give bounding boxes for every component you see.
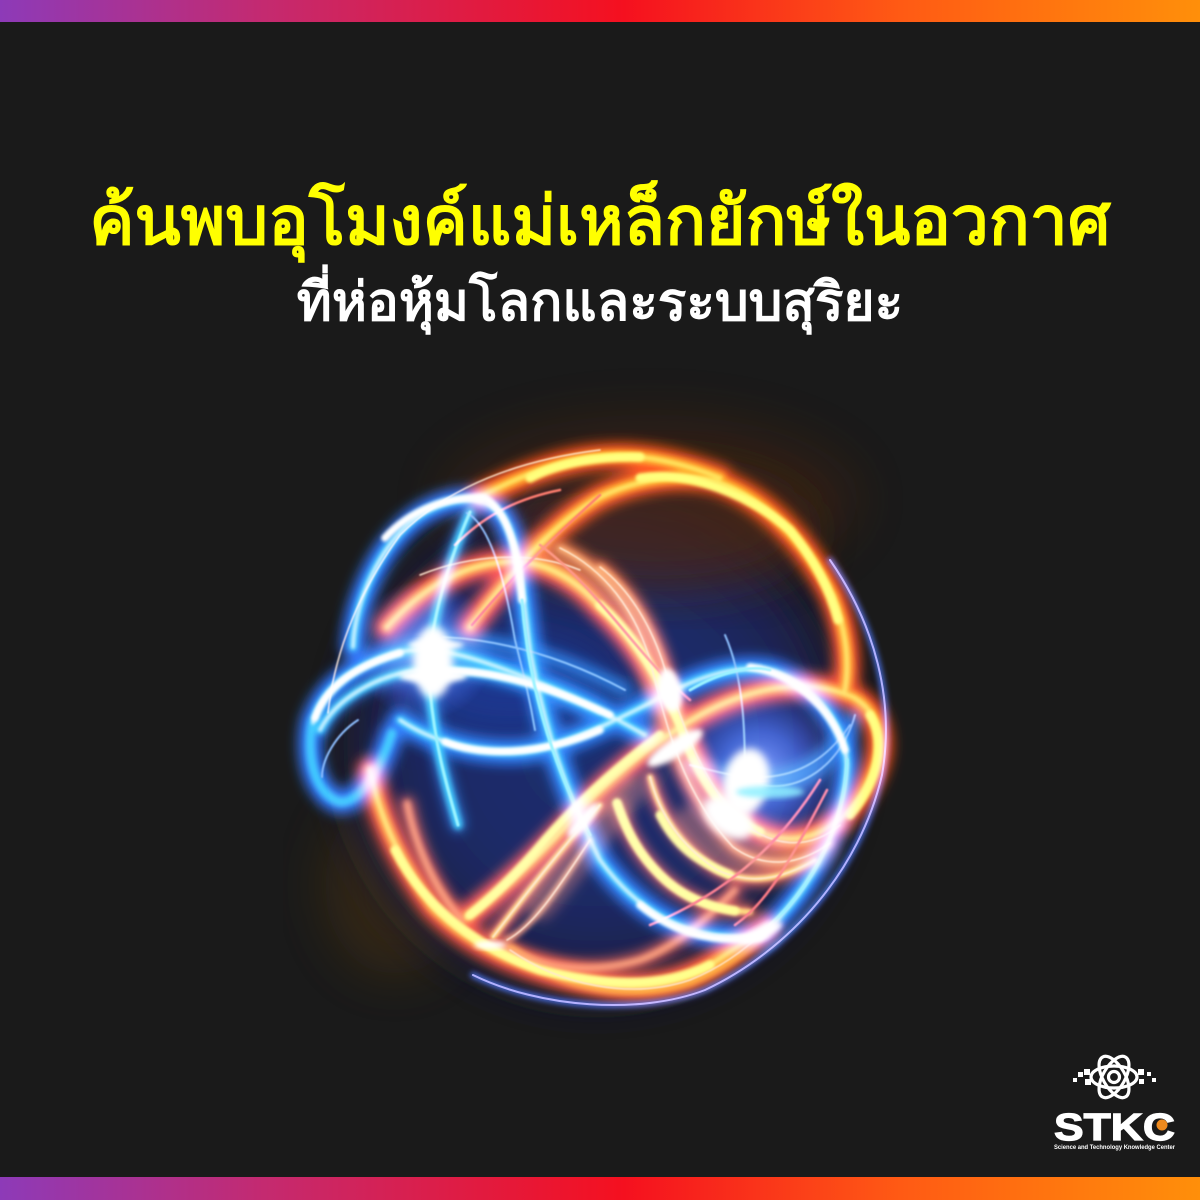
logo tagline: Science and Technology Knowledge Center <box>1054 1145 1176 1151</box>
logo orange dot <box>1156 1120 1168 1130</box>
logo: STKC <box>1054 1052 1176 1151</box>
bright flare: right star <box>675 685 845 855</box>
blue light ribbons <box>310 498 855 939</box>
logo pixel squares <box>1073 1069 1156 1085</box>
title: yellow headline: ค้นพบอุโมงค์แม่เหล็กยักษ์ในอวกาศ <box>89 184 1111 259</box>
thin outer blue ring <box>473 560 886 1005</box>
crossing highlights <box>474 666 784 949</box>
wide translucent orange bundle <box>540 550 820 905</box>
top gradient bar <box>0 0 1200 22</box>
logo wordmark: STKC <box>1054 1107 1175 1149</box>
subtitle: white headline: ที่ห่อหุ้มโลกและระบบสุริยะ <box>297 273 903 332</box>
logo atom icon <box>1091 1052 1137 1102</box>
bright flare: left star <box>355 580 495 720</box>
orange and yellow light ribbons <box>328 450 880 989</box>
bottom gradient bar <box>0 1177 1200 1200</box>
sphere background glow <box>325 415 860 995</box>
